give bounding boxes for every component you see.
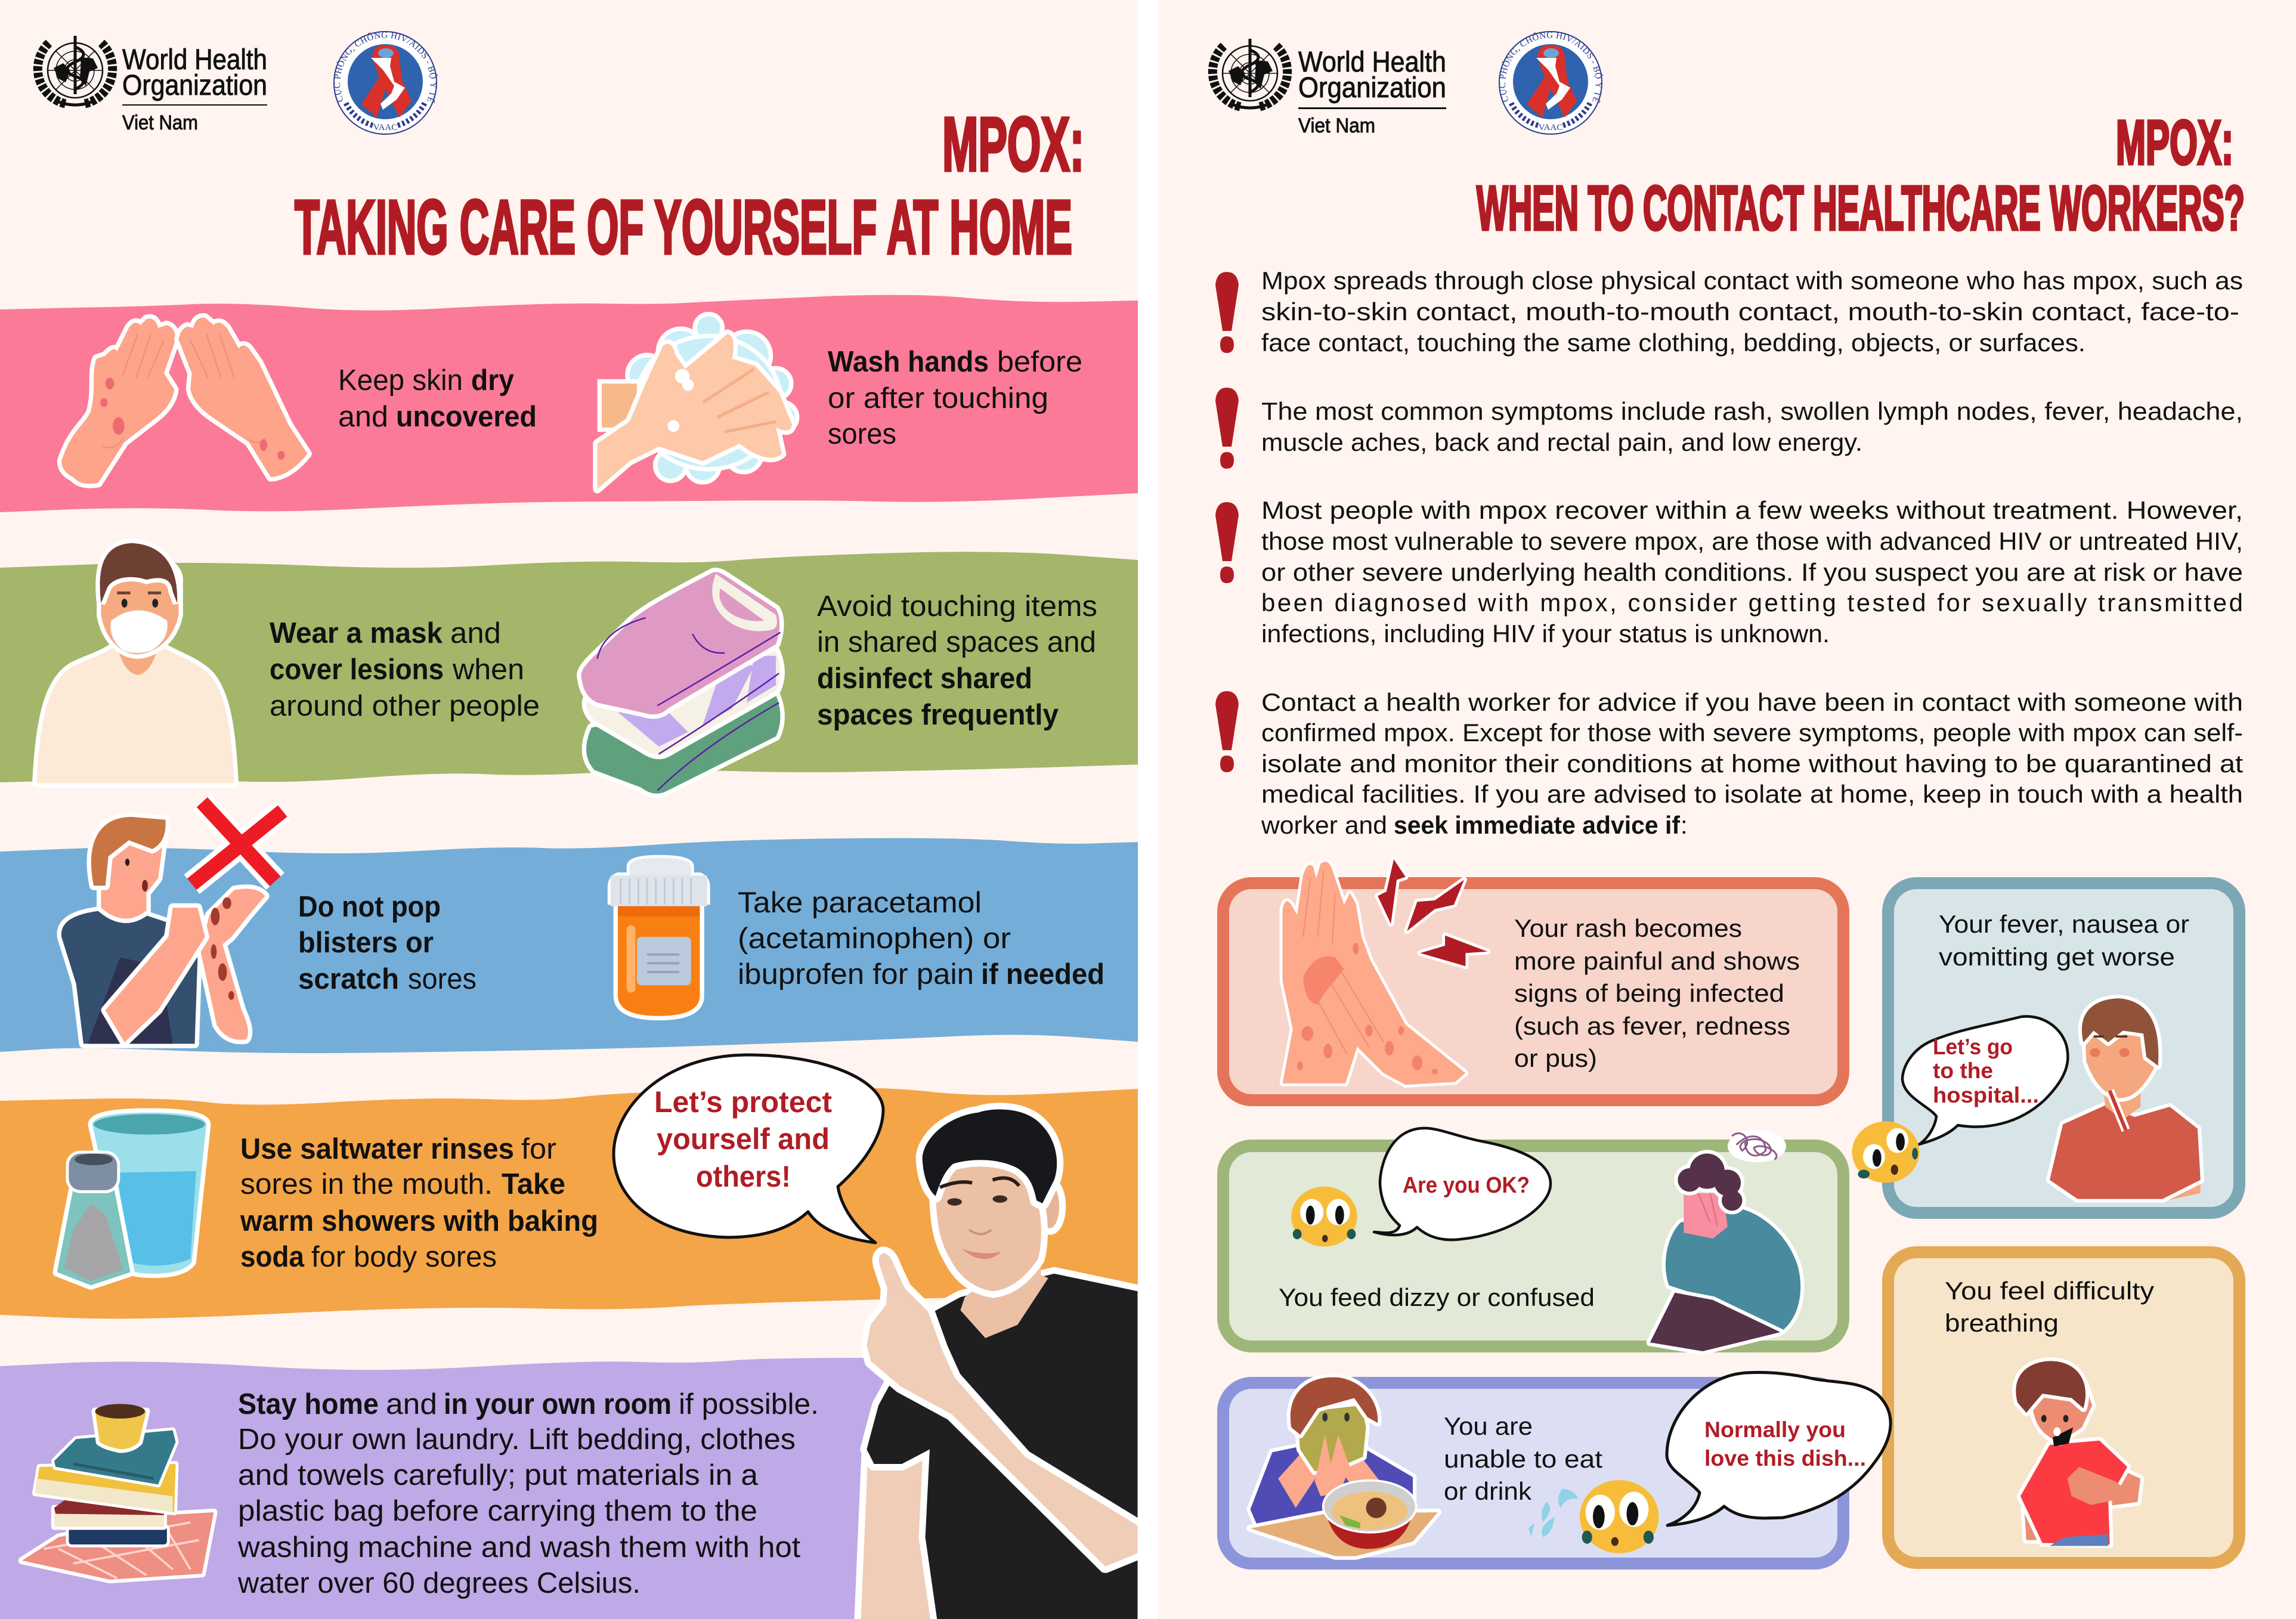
text: wear a mask: when [452, 654, 524, 686]
text: stay home: Stay home [238, 1388, 379, 1420]
text: how mpox spreads [1261, 267, 2243, 357]
text: saltwater rinses: soda [240, 1241, 305, 1273]
text: WHO wordmark [1298, 47, 1446, 137]
text: take paracetamol: if needed [981, 958, 1104, 990]
icon: washing hands [598, 316, 795, 489]
text: wear a mask: cover lesions [270, 654, 444, 686]
text: keep skin dry: and [338, 401, 388, 433]
text: stay home [237, 1388, 819, 1599]
text: dizzy: You feed dizzy or confused [1279, 1283, 1595, 1311]
icon: man with thermometer [2050, 998, 2201, 1200]
text: wear a mask: Wear a mask [270, 617, 443, 649]
band: blue [0, 838, 1138, 1053]
speech bubble: let's go to the hospital: hospital... [1933, 1083, 2039, 1107]
logo: VAAC [333, 31, 438, 135]
text: recovery and testing: Most people with mpox recover within a few weeks without treatment. However, [1261, 496, 2243, 524]
text: avoid touching items: Avoid touching items [817, 590, 1097, 623]
icon: exclamation mark 2 [1215, 388, 1239, 469]
text: contact a health worker [1261, 688, 2243, 839]
band: orange [0, 1088, 1138, 1318]
text: rash: or pus) [1514, 1044, 1597, 1072]
logo: VAAC: VAAC [1539, 123, 1562, 132]
text: unable to eat [1444, 1412, 1602, 1505]
icon: glass of water and salt shaker [57, 1113, 206, 1285]
card: fever, nausea or vomiting [1217, 877, 2245, 1570]
icon: emoji surprised [1291, 1187, 1357, 1246]
text: recovery and testing [1261, 496, 2243, 648]
text: how mpox spreads: Mpox spreads through close physical contact with someone who has mpox, such as [1261, 267, 2243, 295]
logo: VAAC: CỤC PHÒNG, CHỐNG HIV/AIDS - BỘ Y TẾ [335, 32, 438, 104]
text: breathing [1945, 1277, 2154, 1337]
text: WHO wordmark: Viet Nam [122, 112, 198, 134]
icon: exclamation mark 4 [1215, 691, 1239, 772]
card: difficulty breathing [1882, 1246, 2245, 1569]
panel: when to contact healthcare workers [1158, 0, 2296, 1619]
icon: emoji worried [1852, 1122, 1920, 1183]
speech bubble: normally you love this dish [1667, 1373, 1890, 1525]
icon: woman holding head [1650, 1154, 1800, 1351]
logo: VAAC: VAAC [373, 123, 397, 132]
heading: taking care of yourself at home: TAKING CARE OF YOURSELF AT HOME [295, 185, 1072, 270]
text: saltwater rinses: warm showers with baking [240, 1205, 598, 1237]
text: fever: vomitting get worse [1939, 943, 2175, 971]
text: saltwater rinses: Use saltwater rinses [240, 1133, 514, 1165]
text: rash: more painful and shows [1514, 947, 1800, 975]
text: avoid touching items [817, 590, 1097, 731]
text: WHO wordmark: Organization [1298, 72, 1446, 104]
icon: person short of breath [2016, 1361, 2140, 1546]
text: how mpox spreads: face contact, touching the same clothing, bedding, objects, or surfaces. [1261, 329, 2085, 357]
text: wash hands: before [997, 346, 1082, 378]
text: breathing: You feel difficulty [1945, 1277, 2154, 1305]
icon: emoji worried [1580, 1480, 1659, 1553]
text: avoid touching items: in shared spaces and [817, 626, 1096, 658]
text: wash hands: or after touching [828, 382, 1048, 414]
text: keep skin dry: dry [471, 364, 514, 397]
text: rash [1514, 914, 1800, 1072]
text: rash: Your rash becomes [1514, 914, 1742, 942]
text: recovery and testing: those most vulnerable to severe mpox, are those with advanced HIV or untreated HIV, [1261, 527, 2243, 555]
text: stay home: washing machine and wash them with hot [237, 1531, 800, 1564]
logo: VAAC [1499, 31, 1603, 135]
text: do not pop blisters: sores [408, 963, 476, 995]
text: rash: signs of being infected [1514, 979, 1784, 1007]
speech bubble: normally you love this dish: Normally you [1704, 1417, 1846, 1442]
speech bubble: let's protect [614, 1055, 883, 1243]
icon: exclamation mark 1 [1215, 272, 1239, 353]
text: do not pop blisters [298, 891, 476, 995]
text: do not pop blisters: blisters or [298, 927, 434, 959]
text: WHO wordmark: Viet Nam [1298, 114, 1375, 137]
icon: red cross [192, 802, 283, 884]
card: unable to eat or drink [1217, 1377, 1849, 1570]
text: common symptoms: The most common symptoms include rash, swollen lymph nodes, fever, headache, [1261, 397, 2243, 425]
icon: tangled thoughts [1728, 1130, 1786, 1162]
text: saltwater rinses: Take [502, 1168, 565, 1200]
text: take paracetamol: ibuprofen for pain [738, 958, 974, 990]
text: do not pop blisters: Do not pop [298, 891, 441, 923]
text: breathing: breathing [1945, 1309, 2059, 1337]
speech bubble: normally you love this dish: love this dish... [1704, 1446, 1866, 1471]
speech bubble: are you OK: Are you OK? [1403, 1173, 1530, 1198]
text: WHO wordmark: World Health [1298, 47, 1446, 78]
text: fever [1939, 910, 2189, 971]
text: recovery and testing: or other severe underlying health conditions. If you suspect you are at risk or have [1261, 558, 2243, 586]
text: saltwater rinses: for [521, 1133, 556, 1165]
text: saltwater rinses: sores in the mouth. [240, 1168, 493, 1200]
text: stay home: plastic bag before carrying them to the [238, 1495, 757, 1527]
text: recovery and testing: infections, including HIV if your status is unknown. [1261, 620, 1830, 648]
speech bubble: let's protect: yourself and [657, 1122, 830, 1156]
text: wear a mask: around other people [270, 690, 540, 722]
speech bubble: let's go to the hospital: Let’s go [1933, 1035, 2013, 1059]
text: contact a health worker: : [1681, 811, 1688, 839]
text: stay home: Do your own laundry. Lift bedding, clothes [238, 1423, 796, 1456]
icon: person wearing a mask [36, 543, 234, 783]
card: worsening rash [1217, 859, 1849, 1106]
logo: World Health Organization Viet Nam [1212, 39, 1446, 137]
band: pink [0, 295, 1138, 512]
text: contact a health worker: isolate and monitor their conditions at home without having to be quarantined at [1261, 750, 2243, 778]
text: WHO wordmark [122, 44, 267, 134]
speech bubble: let's protect: Let’s protect [654, 1085, 832, 1119]
logo: VAAC: CỤC PHÒNG, CHỐNG HIV/AIDS - BỘ Y TẾ [1500, 32, 1603, 104]
text: stay home: if possible. [679, 1388, 819, 1420]
text: wash hands: Wash hands [828, 346, 989, 378]
icon: hands with rash [61, 317, 308, 484]
card: dizzy or confused [1217, 1128, 2245, 1570]
speech bubble: let's go to the hospital: to the [1933, 1058, 1993, 1083]
band: green [0, 552, 1138, 782]
text: contact a health worker: confirmed mpox. Except for those with severe symptoms, people with mpox can self- [1261, 719, 2243, 747]
icon: sweat drops [1528, 1489, 1578, 1537]
photo figure: man pointing [861, 1109, 1138, 1619]
icon: nauseous man with noodle bowl [1251, 1377, 1438, 1556]
text: contact a health worker: medical facilities. If you are advised to isolate at home, keep in touch with a health [1261, 780, 2243, 808]
text: contact a health worker: seek immediate advice if [1394, 811, 1681, 839]
text: keep skin dry: uncovered [396, 401, 537, 433]
text: keep skin dry [338, 364, 537, 433]
text: unable to eat: or drink [1444, 1477, 1532, 1505]
icon: hand with rash and pain bolts [1283, 859, 1487, 1085]
text: common symptoms [1261, 397, 2243, 456]
text: rash: (such as fever, redness [1514, 1012, 1790, 1040]
text: keep skin dry: Keep skin [338, 364, 463, 397]
text: take paracetamol: Take paracetamol [738, 887, 982, 919]
text: saltwater rinses [240, 1133, 598, 1273]
icon: stacked towels [581, 572, 781, 794]
icon: man scratching rash with red cross [61, 802, 283, 1044]
speech bubble: let's go to the hospital [1902, 1016, 2068, 1144]
text: avoid touching items: spaces frequently [817, 699, 1059, 731]
text: WHO wordmark: World Health [122, 44, 267, 76]
speech bubble: are you OK [1374, 1128, 1551, 1240]
icon: WHO emblem [1212, 39, 1288, 108]
text: stay home: water over 60 degrees Celsius. [237, 1567, 640, 1599]
text: contact a health worker: worker and [1261, 811, 1387, 839]
text: stay home: in your own room [444, 1388, 672, 1420]
text: wash hands: sores [828, 418, 896, 450]
text: wash hands [828, 346, 1082, 450]
text: do not pop blisters: scratch [298, 963, 399, 995]
text: fever: Your fever, nausea or [1939, 910, 2189, 938]
text: avoid touching items: disinfect shared [817, 663, 1032, 695]
text: saltwater rinses: for body sores [311, 1241, 497, 1273]
text: contact a health worker: Contact a health worker for advice if you have been in contact with someone with [1261, 688, 2243, 716]
icon: books, cup and cloth [22, 1404, 213, 1580]
text: how mpox spreads: skin-to-skin contact, mouth-to-mouth contact, mouth-to-skin contact, face-to- [1261, 298, 2239, 326]
band: purple [0, 1358, 1138, 1619]
text: wear a mask: and [450, 617, 501, 649]
heading: MPOX: MPOX: [942, 102, 1084, 187]
text: stay home: and towels carefully; put materials in a [238, 1459, 759, 1491]
text: unable to eat: You are [1444, 1412, 1533, 1440]
text: wear a mask [270, 617, 540, 722]
speech bubble: let's protect: others! [696, 1160, 791, 1193]
icon: WHO emblem [38, 36, 113, 105]
text: recovery and testing: been diagnosed with mpox, consider getting tested for sexually transmitted [1261, 589, 2243, 617]
text: unable to eat: unable to eat [1444, 1445, 1602, 1473]
text: WHO wordmark: Organization [122, 70, 267, 101]
text: common symptoms: muscle aches, back and rectal pain, and low energy. [1261, 428, 1862, 456]
text: take paracetamol: (acetaminophen) or [738, 923, 1011, 955]
icon: exclamation mark 3 [1215, 502, 1239, 583]
icon: pill bottle [611, 858, 707, 1016]
text: stay home: and [386, 1388, 437, 1420]
logo: World Health Organization Viet Nam [38, 36, 267, 134]
text: take paracetamol [738, 887, 1104, 990]
panel: taking care of yourself at home [0, 0, 1138, 1619]
